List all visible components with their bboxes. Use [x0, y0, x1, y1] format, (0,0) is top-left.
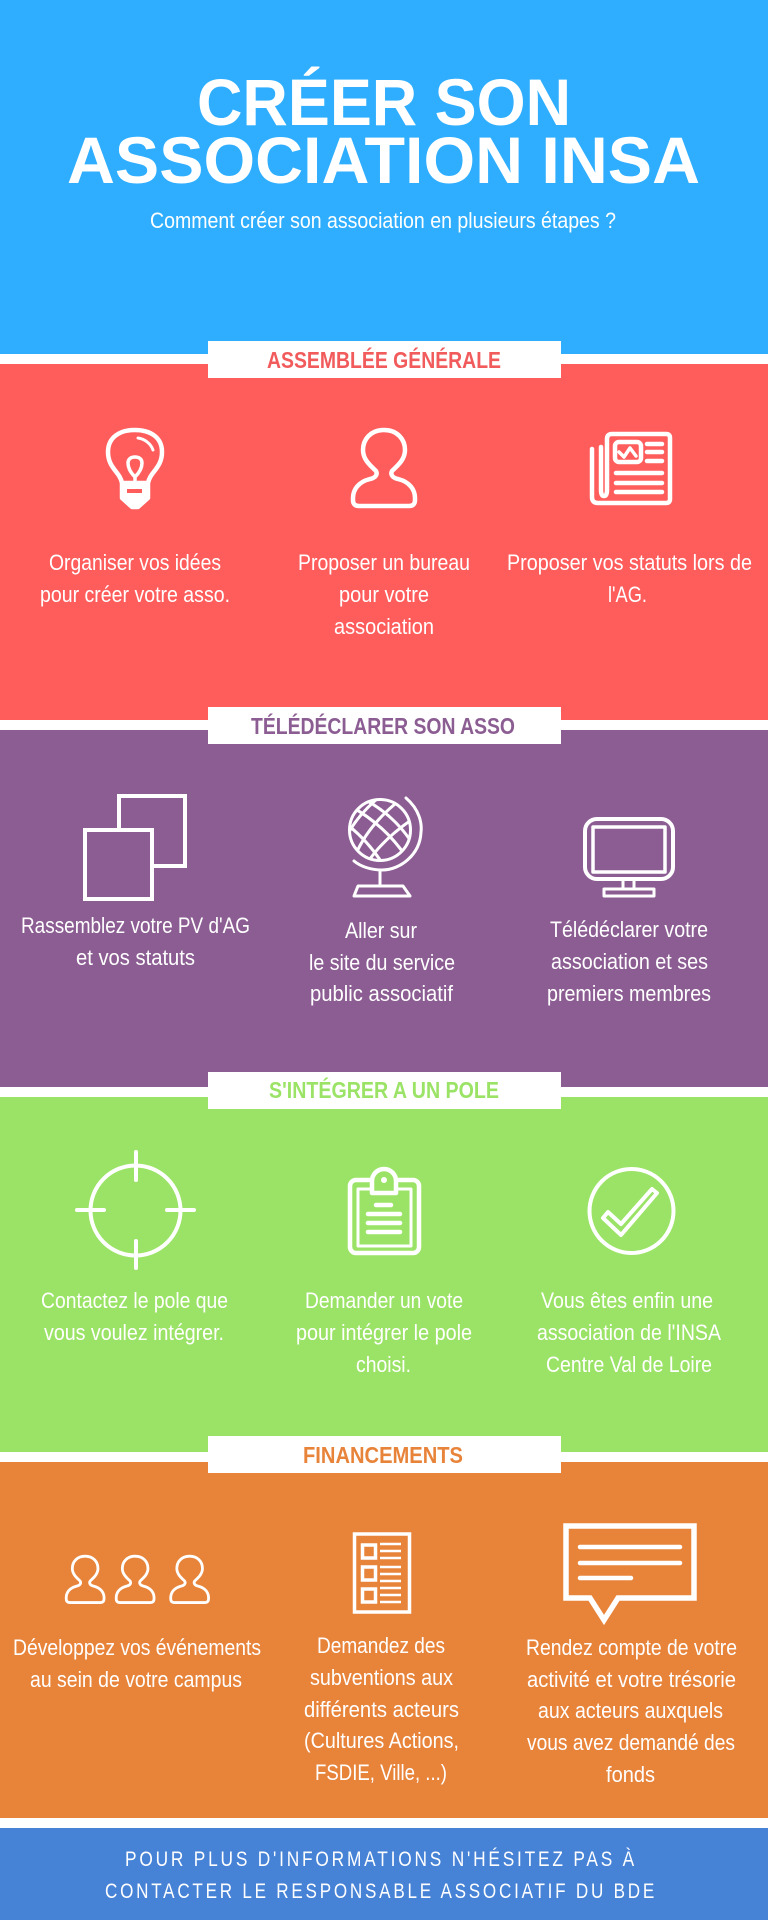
icon: speech bubble	[566, 1526, 694, 1620]
text: développez: au sein de votre campus	[30, 1667, 242, 1692]
text: rendez compte: Rendez compte de votre	[526, 1635, 737, 1660]
text: association INSA: Centre Val de Loire	[546, 1352, 712, 1377]
text: bureau: association	[334, 614, 434, 639]
text: contactez: vous voulez intégrer.	[44, 1320, 224, 1345]
heading banner: télédéclarer: TÉLÉDÉCLARER SON ASSO	[251, 712, 515, 739]
footer panel	[0, 1818, 768, 1920]
icon: three people	[66, 1556, 209, 1603]
icon: monitor	[585, 819, 673, 896]
text: organiser	[40, 550, 230, 607]
text: rassemblez	[21, 913, 250, 970]
heading banner: s'intégrer	[208, 1072, 561, 1109]
icon: check circle	[590, 1169, 674, 1253]
footer text	[105, 1848, 657, 1903]
panel: s'intégrer à un pole	[0, 1072, 768, 1452]
text: développez	[13, 1635, 261, 1692]
text: demandez	[304, 1633, 459, 1785]
text: organiser: Organiser vos idées	[49, 550, 221, 575]
icon: light bulb	[108, 430, 162, 507]
text: aller sur: public associatif	[310, 981, 454, 1006]
icon: target	[77, 1152, 194, 1268]
text: développez: Développez vos événements	[13, 1635, 261, 1660]
heading banner: assemblée générale: ASSEMBLÉE GÉNÉRALE	[267, 346, 501, 373]
heading banner: financements: FINANCEMENTS	[303, 1442, 463, 1468]
text: demander un vote: pour intégrer le pole	[296, 1320, 472, 1345]
text: rendez compte: aux acteurs auxquels	[538, 1698, 723, 1723]
text: demandez: Demandez des	[317, 1633, 445, 1658]
heading banner: financements	[208, 1436, 561, 1473]
text: demander un vote	[296, 1288, 472, 1377]
text: statuts: l'AG.	[608, 582, 647, 607]
title	[67, 65, 700, 197]
text: rendez compte: vous avez demandé des	[527, 1730, 735, 1755]
text: aller sur: le site du service	[309, 950, 455, 975]
text: demander un vote: Demander un vote	[305, 1288, 463, 1313]
text: demandez: différents acteurs	[304, 1697, 459, 1722]
text: bureau: pour votre	[339, 582, 429, 607]
heading banner: télédéclarer	[208, 707, 561, 744]
icon: clipboard	[350, 1169, 419, 1253]
text: rendez compte: fonds	[606, 1762, 655, 1787]
text: demander un vote: choisi.	[356, 1352, 411, 1377]
subtitle: Comment créer son association en plusieurs étapes ?	[150, 208, 616, 233]
text: organiser: pour créer votre asso.	[40, 582, 230, 607]
header panel	[0, 0, 768, 354]
text: demandez: subventions aux	[310, 1665, 453, 1690]
text: association INSA: Vous êtes enfin une	[541, 1288, 713, 1313]
panel: financements	[0, 1436, 768, 1818]
text: bureau: Proposer un bureau	[298, 550, 470, 575]
heading banner: s'intégrer: S'INTÉGRER A UN POLE	[269, 1076, 499, 1103]
text: aller sur	[309, 918, 455, 1006]
icon: globe	[344, 798, 421, 896]
footer text: CONTACTER LE RESPONSABLE ASSOCIATIF DU BDE	[105, 1880, 657, 1903]
title: CRÉER SON	[197, 65, 571, 139]
text: association INSA	[537, 1288, 721, 1377]
heading banner: assemblée générale	[208, 341, 561, 378]
text: télédéclarer: association et ses	[551, 949, 708, 974]
icon: newspaper	[592, 434, 670, 503]
text: demandez: (Cultures Actions,	[304, 1728, 459, 1753]
text: demandez: FSDIE, Ville, ...)	[315, 1760, 447, 1785]
text: contactez: Contactez le pole que	[41, 1288, 228, 1313]
icon: person	[353, 430, 415, 506]
text: aller sur: Aller sur	[345, 918, 417, 943]
footer text: POUR PLUS D'INFORMATIONS N'HÉSITEZ PAS À	[125, 1848, 637, 1871]
text: rassemblez: Rassemblez votre PV d'AG	[21, 913, 250, 938]
text: rendez compte: activité et votre trésorie	[527, 1667, 736, 1692]
panel: assemblée générale	[0, 341, 768, 720]
text: bureau	[298, 550, 470, 639]
text: rendez compte	[526, 1635, 737, 1787]
text: contactez	[41, 1288, 228, 1345]
panel: télédéclarer son asso	[0, 707, 768, 1087]
text: télédéclarer: Télédéclarer votre	[550, 917, 708, 942]
title: ASSOCIATION INSA	[67, 123, 700, 197]
text: statuts	[507, 550, 752, 607]
text: association INSA: association de l'INSA	[537, 1320, 721, 1345]
text: télédéclarer: premiers membres	[547, 981, 711, 1006]
text: rassemblez: et vos statuts	[76, 945, 195, 970]
text: télédéclarer	[547, 917, 711, 1006]
icon: stacked pages	[85, 796, 185, 899]
icon: checklist	[354, 1534, 410, 1612]
